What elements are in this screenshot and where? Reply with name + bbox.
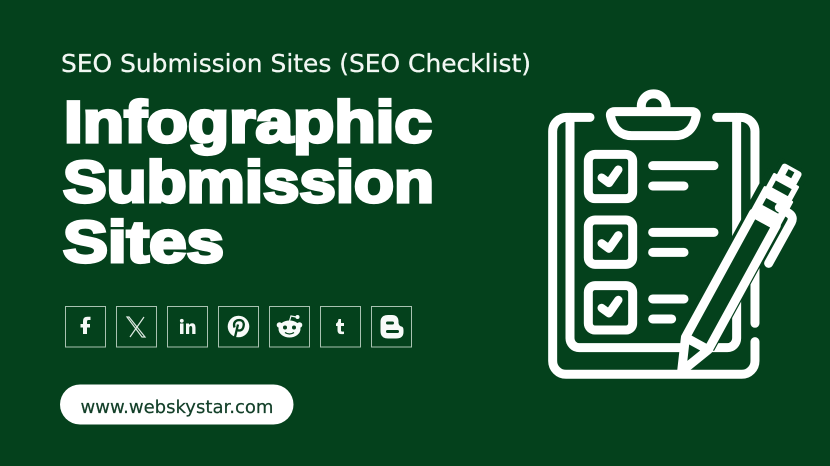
clip (610, 94, 696, 136)
icon: linkedin (168, 306, 208, 347)
icon: facebook (66, 306, 106, 347)
icon: blogger (372, 306, 412, 347)
social icons row (66, 306, 412, 347)
clipboard board (553, 117, 755, 374)
website pill (60, 384, 294, 424)
checkbox 3 (588, 286, 633, 330)
icon: tumblr (320, 306, 360, 347)
icon: reddit (270, 306, 310, 347)
paper sheet (570, 117, 737, 348)
checkbox 2 (588, 220, 633, 264)
icon: pinterest (218, 306, 258, 347)
title: Submission (63, 150, 434, 215)
check 2 (602, 235, 618, 249)
check 3 (602, 300, 618, 313)
icon: X (116, 306, 156, 347)
subtitle: SEO Submission Sites (SEO Checklist) (61, 49, 531, 78)
pen (662, 154, 811, 380)
check 1 (602, 170, 618, 183)
checklist lines (653, 166, 714, 319)
checkbox 1 (588, 154, 633, 199)
website pill: www.webskystar.com (80, 397, 274, 418)
icon: clipboard with pen (553, 94, 811, 380)
title: Sites (63, 210, 224, 275)
title: Infographic (64, 90, 432, 155)
pen clip (769, 208, 792, 263)
title (63, 90, 434, 275)
